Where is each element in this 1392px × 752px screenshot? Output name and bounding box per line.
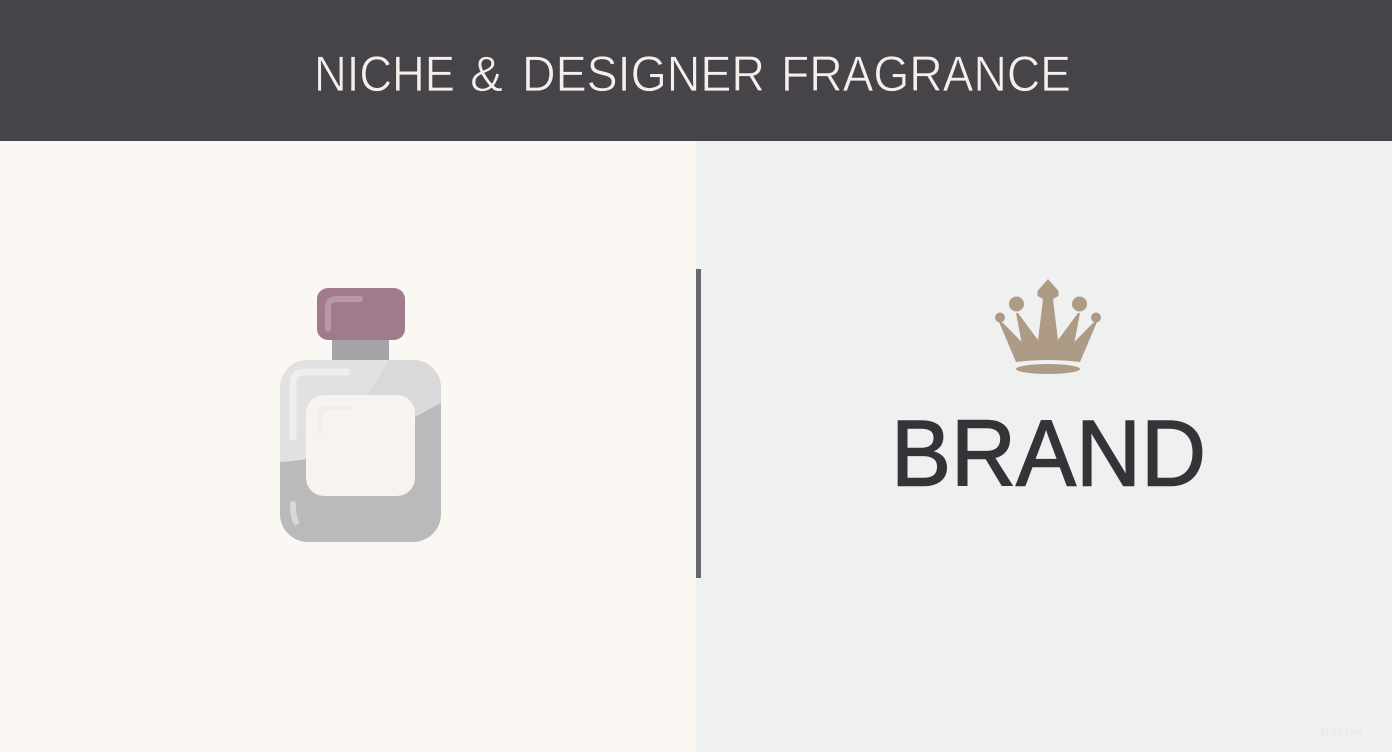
bottle neck: [332, 335, 389, 362]
header band: [0, 0, 1392, 141]
bottle label: [306, 395, 415, 496]
panel: right designer brand background: [696, 141, 1392, 752]
bottle cap: [317, 288, 405, 340]
bottle body: [280, 360, 441, 542]
title: &: [470, 46, 503, 102]
title: NICHE: [314, 46, 455, 102]
icon: perfume bottle: [280, 288, 441, 542]
watermark text: 1f 03 Lno: [1320, 727, 1362, 738]
title: FRAGRANCE: [781, 46, 1071, 102]
title: [314, 46, 1071, 102]
center divider: [696, 269, 701, 578]
panel: left niche fragrance background: [0, 141, 696, 752]
icon: crown: [995, 279, 1101, 374]
brand wordmark: BRAND: [891, 400, 1206, 506]
title: DESIGNER: [522, 46, 765, 102]
